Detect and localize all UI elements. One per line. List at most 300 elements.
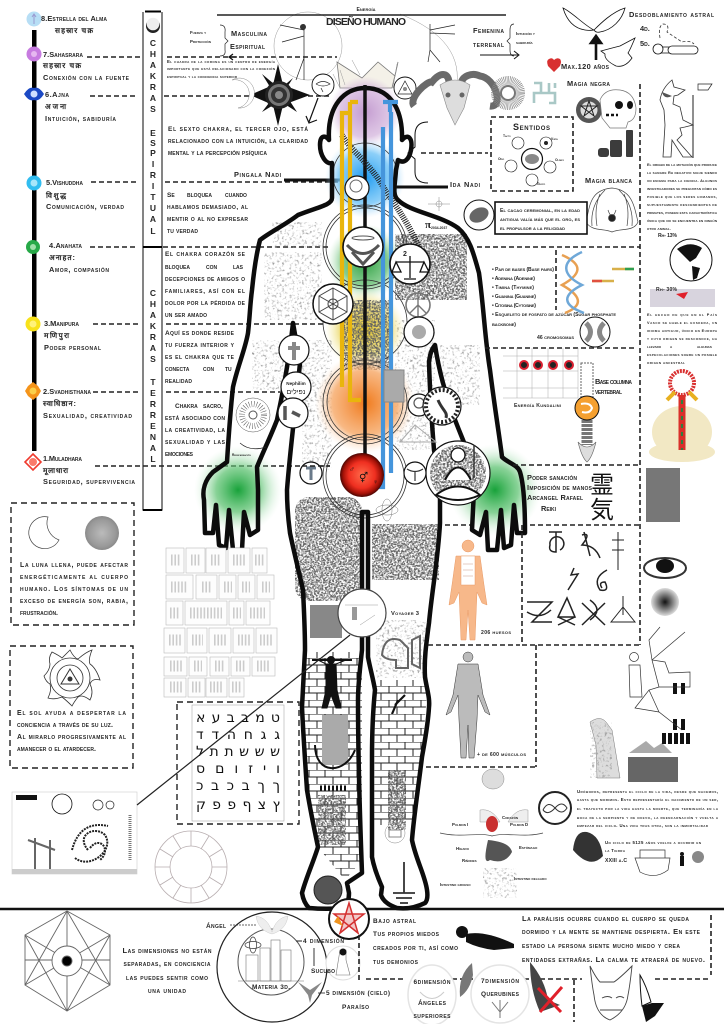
vertical label: espiritual: E bbox=[150, 128, 156, 138]
text: ouroboros: boca de la serpiente y de nuevo, la reencarnación y vuelta a bbox=[577, 815, 719, 820]
illustration: vitruvian man left bbox=[274, 12, 342, 80]
mudra hands strokes bbox=[169, 560, 272, 687]
ida channel bbox=[367, 102, 398, 487]
vertical label: espiritual: I bbox=[152, 181, 154, 191]
icon: sun bbox=[44, 650, 100, 706]
baseline bbox=[238, 980, 304, 982]
panel: cacao text: antigua valía más que el oro, es bbox=[500, 217, 580, 223]
vertical label: espiritual: S bbox=[150, 138, 156, 148]
text: garganta bbox=[167, 192, 248, 235]
organ labels: Pulmon D bbox=[510, 822, 528, 827]
text: euskera: especulaciones sobre un posible bbox=[647, 353, 717, 357]
icon: manipura chakra bbox=[26, 316, 40, 332]
icon: portrait bbox=[384, 370, 404, 402]
body glow: right hand bbox=[449, 444, 541, 536]
icon: small book bbox=[310, 605, 342, 638]
text: muladhara: मूलाधारा bbox=[42, 466, 69, 476]
icon: silhouettes bbox=[662, 683, 690, 744]
text: muladhara: Seguridad, supervivencia bbox=[43, 477, 135, 486]
icon: pentacle bbox=[576, 97, 602, 123]
texture: leg bricks left bbox=[304, 652, 362, 876]
table: immune chart bbox=[503, 348, 578, 398]
texture: right knee bbox=[376, 620, 426, 678]
icon: arc shape on leg bbox=[315, 745, 355, 768]
text: kundalini: vertebral bbox=[595, 387, 622, 396]
text: mutación: primates, poseen esta característica bbox=[647, 210, 718, 215]
vertical label: terrenal: R bbox=[150, 399, 156, 409]
atom bbox=[245, 937, 261, 953]
text: mutación: investigadores se preguntan cómo es bbox=[647, 186, 717, 191]
icon: scales: 2 bbox=[403, 251, 407, 258]
panel: 6 dimension: Ángeles bbox=[418, 998, 447, 1007]
panel: cacao text bbox=[495, 202, 587, 234]
text: anahata: 4.Anahata bbox=[49, 241, 82, 250]
text: bajo astral: Bajo astral bbox=[373, 918, 416, 925]
text: manipura: tu bbox=[225, 366, 232, 373]
icon: column crescent bbox=[146, 18, 160, 33]
text: parálisis bbox=[522, 914, 705, 964]
illustration: skeleton bbox=[449, 540, 487, 640]
icon: wings bbox=[563, 8, 625, 32]
panel: 6 dimension: 6dimensión bbox=[414, 978, 451, 986]
text: ajna: 6.Ajna bbox=[45, 90, 69, 99]
text: sacro: Chakra bbox=[175, 403, 198, 410]
text: garganta: hablamos demasiado, al bbox=[167, 204, 248, 211]
icon: anahata chakra bbox=[26, 240, 40, 254]
text: garganta: Se bbox=[167, 192, 175, 199]
vertical label: terrenal: S bbox=[150, 354, 156, 364]
texture: right waist bbox=[395, 320, 435, 450]
sun text: conciencia a través de su luz. bbox=[17, 721, 113, 729]
panel: DNA: • Adenina (Adenine) bbox=[492, 276, 535, 282]
icon: nephilim: נפילים bbox=[287, 388, 306, 396]
organ labels: Pulmon I bbox=[452, 822, 468, 827]
vertical label: espiritual: S bbox=[150, 104, 156, 114]
icon: blocks circle bbox=[385, 823, 405, 843]
text: manipura: Aquí es donde reside bbox=[165, 329, 235, 337]
texture: right chest bbox=[395, 234, 467, 300]
text: soul star: 8.Estrella del Alma bbox=[41, 14, 107, 23]
text: manipura: मणिपुरा bbox=[43, 331, 70, 341]
text: mutación: única que no se encuentra en ningún bbox=[647, 218, 717, 223]
central channel bbox=[342, 85, 420, 470]
label: femenina: Femenina bbox=[473, 26, 504, 35]
hebrew rows: ג ג ח ה ד ד bbox=[196, 727, 280, 743]
icon: praying hands bbox=[640, 975, 664, 1022]
label: masculina: Masculina bbox=[231, 29, 267, 38]
icon: reencarnacion arrow bbox=[232, 443, 266, 457]
illustration: voyager plate bbox=[12, 792, 137, 874]
panel: 6 dimension: superiores bbox=[414, 1013, 451, 1020]
texture: solar bbox=[340, 300, 390, 370]
vertical label: terrenal: T bbox=[150, 377, 156, 387]
illustration: spine bbox=[575, 363, 599, 462]
text: manipura: tu fuerza interior y bbox=[165, 342, 235, 349]
text: dimensiones: separadas, en conciencia bbox=[124, 959, 211, 968]
text: manipura bbox=[43, 319, 101, 352]
brain centre bbox=[522, 148, 542, 170]
chakra thin rings bbox=[323, 143, 407, 518]
icon: small crescent bbox=[262, 298, 278, 306]
text: dimensiones: las puedes sentir como bbox=[126, 973, 208, 982]
icon: uterus bbox=[404, 462, 426, 484]
icon: atom bbox=[376, 499, 398, 521]
label: pingala nadi bbox=[234, 170, 342, 180]
icon: male organ bbox=[300, 462, 322, 484]
panel: coronal text bbox=[167, 59, 276, 79]
panel: DNA: • Timina (Thymine) bbox=[492, 285, 534, 291]
city sketch bbox=[246, 940, 291, 981]
text: corazón: dolor por la pérdida de bbox=[165, 299, 246, 307]
texture: right leg climbers bbox=[388, 770, 406, 830]
text: ouroboros bbox=[577, 789, 719, 828]
text: dimensiones bbox=[122, 946, 212, 995]
panel: DNA bbox=[492, 252, 634, 347]
icon: runner bbox=[392, 695, 405, 714]
text: sahasrara: सहस्रार चक्र bbox=[42, 61, 81, 70]
panel: DNA: 46 cromosomas bbox=[537, 335, 574, 341]
icon: candles bbox=[598, 130, 633, 157]
sun text bbox=[17, 710, 126, 753]
icon: sahasrara chakra bbox=[26, 46, 42, 62]
map: basque bbox=[650, 287, 715, 307]
text: sexto chakra bbox=[168, 126, 308, 157]
text: dimensiones: una unidad bbox=[148, 986, 186, 995]
label: masculina: Protección bbox=[190, 39, 211, 44]
vertical label: espiritual bbox=[150, 38, 157, 236]
text: kundalini: Energía Kundalini bbox=[514, 403, 561, 409]
texture: right thigh bbox=[372, 524, 439, 580]
icon: svadhisthana chakra bbox=[25, 382, 41, 400]
icon: group silhouettes bbox=[320, 786, 348, 790]
text: garganta: tu verdad bbox=[167, 228, 198, 235]
text: sanación bbox=[527, 473, 593, 513]
kanji reiki: 霊 bbox=[590, 465, 614, 500]
panel: DNA: • Citosina (Cytosine) bbox=[492, 303, 536, 309]
text: corazón: familiares, así con el bbox=[165, 287, 245, 295]
texture: city bbox=[272, 222, 322, 248]
texture: stele bbox=[295, 497, 362, 601]
icon: triangle sketch bbox=[400, 425, 436, 442]
text: manipura bbox=[165, 329, 235, 385]
text: mutación: supuestamente descendientes de bbox=[647, 203, 717, 207]
vertical label: espiritual: P bbox=[150, 148, 156, 158]
panel: sentidos: Sentidos bbox=[513, 122, 550, 132]
human body outline bbox=[203, 88, 525, 909]
illustration: crown bbox=[333, 60, 398, 88]
text: muladhara bbox=[42, 454, 135, 486]
label: 4 dimension bbox=[296, 937, 344, 966]
panel: cacao text: El cacao ceremonial, en la edad bbox=[500, 208, 580, 214]
materia label: Materia 3d. bbox=[252, 984, 290, 991]
kanji reiki bbox=[590, 465, 614, 525]
vertical label: espiritual: A bbox=[150, 214, 156, 224]
texture: left shin bbox=[322, 715, 348, 765]
text: sacro: la creatividad, la bbox=[165, 427, 225, 434]
lungs bbox=[480, 810, 528, 822]
text: sexto chakra: mental y la percepción psíquica bbox=[168, 149, 267, 157]
vertical label: terrenal: E bbox=[150, 388, 156, 398]
text: ciclo bbox=[605, 840, 701, 864]
text: garganta: bloquea bbox=[187, 192, 212, 199]
text: max años: Max.120 años bbox=[561, 62, 610, 71]
text: corazón: un ser amado bbox=[165, 312, 207, 319]
text: mutación: posible que los seres humanos, bbox=[647, 195, 717, 199]
panel: anubis bbox=[660, 80, 712, 158]
icon: chakra root orb: ♀ bbox=[373, 479, 378, 486]
text: kundalini: Base columna bbox=[595, 377, 632, 386]
text: sanación: Poder sanación bbox=[527, 473, 577, 482]
text: vishuddha: Comunicación, verdad bbox=[46, 202, 124, 211]
text: euskera: algunas bbox=[697, 345, 712, 349]
vertical label: espiritual: H bbox=[150, 49, 156, 59]
hebrew rows bbox=[196, 710, 280, 813]
text: vishuddha bbox=[45, 178, 124, 211]
panel: sentidos bbox=[491, 117, 573, 191]
text: corazón: bloquea bbox=[165, 264, 190, 271]
panel: 7 dimension: Querubines bbox=[481, 991, 520, 998]
title: Energía bbox=[357, 7, 376, 13]
pi note: 2034-2037 bbox=[431, 226, 447, 230]
vertical label: terrenal: R bbox=[150, 410, 156, 420]
text: bajo astral bbox=[373, 918, 458, 966]
icon: white magic woman bbox=[586, 188, 638, 232]
text: anahata: Amor, compasión bbox=[49, 265, 109, 274]
text: euskera: Vasco se hable el euskera, un bbox=[647, 321, 717, 325]
hebrew rows: ך ך ב כ ב כ bbox=[196, 778, 280, 794]
organ labels: Intestino delgado bbox=[514, 876, 547, 881]
text: ouroboros: empezar del ciclo. Una vida tras otra, son la inmortalidad bbox=[577, 823, 709, 828]
text: euskera: a bbox=[670, 345, 673, 349]
text: corazón: El chakra corazón se bbox=[165, 250, 246, 258]
icon: reencarnacion arrow: Reencarnación bbox=[232, 453, 251, 457]
hebrew rows: ט מ ב ב ע א bbox=[196, 710, 280, 726]
text: garganta: cuando bbox=[225, 192, 247, 199]
DNA helix bbox=[562, 252, 634, 313]
icon: nephilim bbox=[281, 372, 311, 402]
icon: sleeping person bbox=[456, 926, 514, 950]
icon: winged heart bbox=[343, 227, 383, 267]
icon: globe bbox=[670, 239, 712, 281]
icon: muladhara chakra bbox=[25, 454, 41, 470]
chromosome icon bbox=[580, 317, 610, 347]
icon: pentagram circle bbox=[329, 899, 369, 939]
icon: succubus bbox=[326, 946, 360, 980]
icon: chakra root orb bbox=[340, 453, 384, 497]
hebrew rows: ש ש ש ת ת ל bbox=[196, 744, 280, 760]
arrow: third eye bbox=[306, 98, 318, 123]
text: sanación: Reiki bbox=[541, 504, 557, 513]
illustration: muscle man bbox=[446, 652, 490, 758]
icon: person and earth bbox=[680, 851, 704, 866]
text: ouroboros: el trayecto por la vida hasta la muerte, que terminaría en la bbox=[577, 806, 719, 811]
panel: sun bbox=[10, 646, 133, 768]
text: manipura: conecta bbox=[165, 366, 190, 373]
text: sahasrara bbox=[42, 50, 130, 82]
label: ida nadi: Ida Nadi bbox=[450, 180, 481, 189]
icon: full moon bbox=[85, 516, 119, 550]
illustration: constellation bbox=[629, 627, 690, 730]
kundalini orb bbox=[575, 396, 599, 420]
bottom divider bbox=[0, 908, 724, 910]
column frame bbox=[143, 12, 162, 510]
organ labels bbox=[440, 815, 547, 887]
vertical label: espiritual: L bbox=[150, 226, 156, 236]
text: manipura: realidad bbox=[165, 378, 192, 385]
icon: feather wing bbox=[460, 963, 473, 997]
text: sacro: emociones bbox=[165, 451, 194, 458]
icon: crescent bbox=[29, 517, 59, 549]
texture: equations on right arm bbox=[440, 345, 480, 405]
illustration: reiki symbols bbox=[527, 532, 635, 625]
panel: DNA: backbone) bbox=[492, 322, 516, 328]
icon: climber bbox=[312, 656, 352, 708]
icon: gray angel bbox=[298, 982, 322, 1003]
text: ciclo: la Tierra bbox=[605, 848, 626, 853]
icon: phoenix bbox=[423, 387, 461, 425]
text: mutación bbox=[647, 162, 718, 239]
vertical label: espiritual: R bbox=[150, 82, 156, 92]
text: ajna: अजना bbox=[45, 102, 67, 111]
text: muladhara: 1.Muladhara bbox=[43, 454, 82, 463]
stomach bbox=[485, 840, 512, 861]
icon: voyager circle bbox=[338, 589, 386, 637]
body glow: heart bbox=[327, 224, 403, 300]
illustration: digestive bbox=[440, 769, 547, 898]
text: desdoblamiento astral: 5d. bbox=[640, 39, 650, 48]
panel: ouroboros bbox=[539, 792, 571, 824]
icon: heart bbox=[547, 58, 561, 72]
label: femenina: sabiduría bbox=[516, 40, 534, 45]
label: masculina: Fuerza y bbox=[190, 30, 206, 35]
icon: ground bbox=[393, 862, 415, 903]
vertical label: terrenal: A bbox=[150, 343, 156, 353]
text: euskera: y cuyo origen se desconoce, ha bbox=[647, 337, 718, 341]
text: sacro: sexualidad y las bbox=[165, 439, 226, 446]
illustration: pyramids and relief bbox=[628, 741, 678, 782]
pingala channel bbox=[342, 102, 361, 400]
sun text: Al mirarlo progresivamente al bbox=[17, 734, 126, 741]
text: mutación: la sangre Rh negativo sigue siendo bbox=[647, 171, 718, 175]
panel: coronal text: importante que está relacionado con la conexión bbox=[167, 66, 275, 71]
text: sacro bbox=[165, 403, 226, 458]
text: mutación: El origen de la mutación que produce bbox=[647, 162, 717, 167]
text: magia negra: Magia negra bbox=[567, 79, 610, 88]
icon: star compass bbox=[250, 64, 310, 126]
panel: coronal text: El chakra de la corona es un centro de energía bbox=[167, 59, 276, 64]
illustration: mudras chart bbox=[164, 548, 277, 697]
text: bajo astral: Tus propios miedos bbox=[373, 931, 440, 938]
label: ida nadi bbox=[396, 180, 481, 189]
illustration: vitruvian man right bbox=[400, 14, 457, 90]
panel: 7 dimension bbox=[471, 965, 529, 1023]
panel: cacao text: el propulsor a la felicidad bbox=[500, 226, 565, 232]
text: 206 huesos: 206 huesos bbox=[481, 630, 511, 636]
text: anahata bbox=[49, 241, 109, 274]
icon: nephilim: Nephilim bbox=[286, 381, 306, 386]
icon: crossed demon bbox=[530, 962, 562, 1012]
icon: triangle eye bbox=[394, 77, 416, 99]
vertical label: terrenal: A bbox=[150, 443, 156, 453]
icon: astral body bbox=[653, 24, 698, 54]
icon: earth bbox=[314, 876, 342, 904]
label: femenina: terrenal bbox=[473, 40, 504, 49]
label: pingala nadi: Pingala Nadi bbox=[234, 170, 282, 179]
label: 4 dimension: 4 dimensión bbox=[303, 937, 344, 945]
intestines bbox=[483, 868, 517, 898]
text: sacro: está asociado con bbox=[165, 415, 225, 422]
title bbox=[217, 7, 506, 28]
vertical label: espiritual: A bbox=[150, 60, 156, 70]
text: sexto chakra: El sexto chakra, el tercer ojo, está bbox=[168, 126, 308, 133]
vertical label: espiritual: U bbox=[150, 203, 156, 213]
text: manipura: Poder personal bbox=[44, 343, 101, 352]
organ labels: Riñones bbox=[462, 858, 477, 863]
texture: leg bricks right bbox=[374, 680, 426, 825]
icon: ajna chakra bbox=[24, 88, 44, 100]
text: parálisis: estado la persona siente mucho miedo y crea bbox=[522, 941, 680, 950]
vertical label: terrenal bbox=[150, 288, 157, 464]
vertical label: terrenal: A bbox=[150, 310, 156, 320]
vertical label: espiritual: A bbox=[150, 93, 156, 103]
text: ciclo: XXIII a.C bbox=[605, 858, 627, 864]
body glow: solar plexus bbox=[325, 290, 405, 370]
vertical label: terrenal: E bbox=[150, 421, 156, 431]
organ labels: Estómago bbox=[519, 845, 538, 850]
diagram: materia circles bbox=[217, 912, 327, 1022]
organ labels: Corazón bbox=[502, 815, 518, 820]
icon: sun rays bbox=[496, 80, 520, 106]
map: basque: Rh- 30% bbox=[656, 287, 677, 293]
vertical label: terrenal: K bbox=[150, 321, 157, 331]
vertical label: espiritual: T bbox=[150, 192, 156, 202]
text: dimensiones: Las dimensiones no están bbox=[122, 946, 212, 955]
label: succubus: Sucubo bbox=[311, 968, 335, 975]
kanji reiki: 気 bbox=[590, 490, 614, 525]
moon text: humano. Los síntomas de un bbox=[20, 585, 128, 593]
panel: DNA: • Guanina (Guanine) bbox=[492, 294, 536, 300]
illustration: hexagon diagram bbox=[25, 911, 110, 1011]
chakra axis line bbox=[32, 30, 36, 451]
text: parálisis: entidades extrañas. La calma te atraerá de nuevo. bbox=[522, 955, 705, 964]
body glow: crown bbox=[329, 76, 401, 148]
illustration: black hole bbox=[644, 558, 686, 616]
text: parálisis: dormido y la mente se mantiene despierta. En este bbox=[522, 927, 701, 936]
sun text: amanecer o el atardecer. bbox=[17, 746, 96, 753]
label: femenina: Intuición y bbox=[516, 31, 535, 36]
panel: moon bbox=[11, 503, 134, 625]
bottom dashes bbox=[359, 915, 711, 1022]
icon: soul star chakra bbox=[26, 12, 42, 26]
text: euskera: El hecho de que en el País bbox=[647, 312, 717, 317]
moon text: frustración. bbox=[20, 609, 58, 617]
heart organ bbox=[486, 816, 498, 832]
panel: chakras column bbox=[143, 12, 162, 510]
text: voyager: Voyager 3 bbox=[391, 611, 420, 617]
organ labels: Intestino grueso bbox=[440, 882, 471, 887]
icon: head helmet bbox=[382, 636, 420, 668]
text: soul star: सहस्रार चक्र bbox=[54, 26, 93, 35]
sense smell: Olfato bbox=[555, 158, 564, 162]
text: sahasrara: Conexión con la fuente bbox=[43, 73, 130, 82]
texture: grid scaffolding bbox=[252, 340, 288, 390]
text: ajna: Intuición, sabiduría bbox=[45, 114, 116, 123]
text: ajna bbox=[45, 90, 116, 123]
body glow: left hand bbox=[194, 446, 282, 534]
text: vishuddha: विशुद्ध bbox=[45, 191, 67, 201]
label: masculina: Espiritual bbox=[230, 42, 265, 51]
text: anahata: अनाहत: bbox=[49, 253, 75, 262]
